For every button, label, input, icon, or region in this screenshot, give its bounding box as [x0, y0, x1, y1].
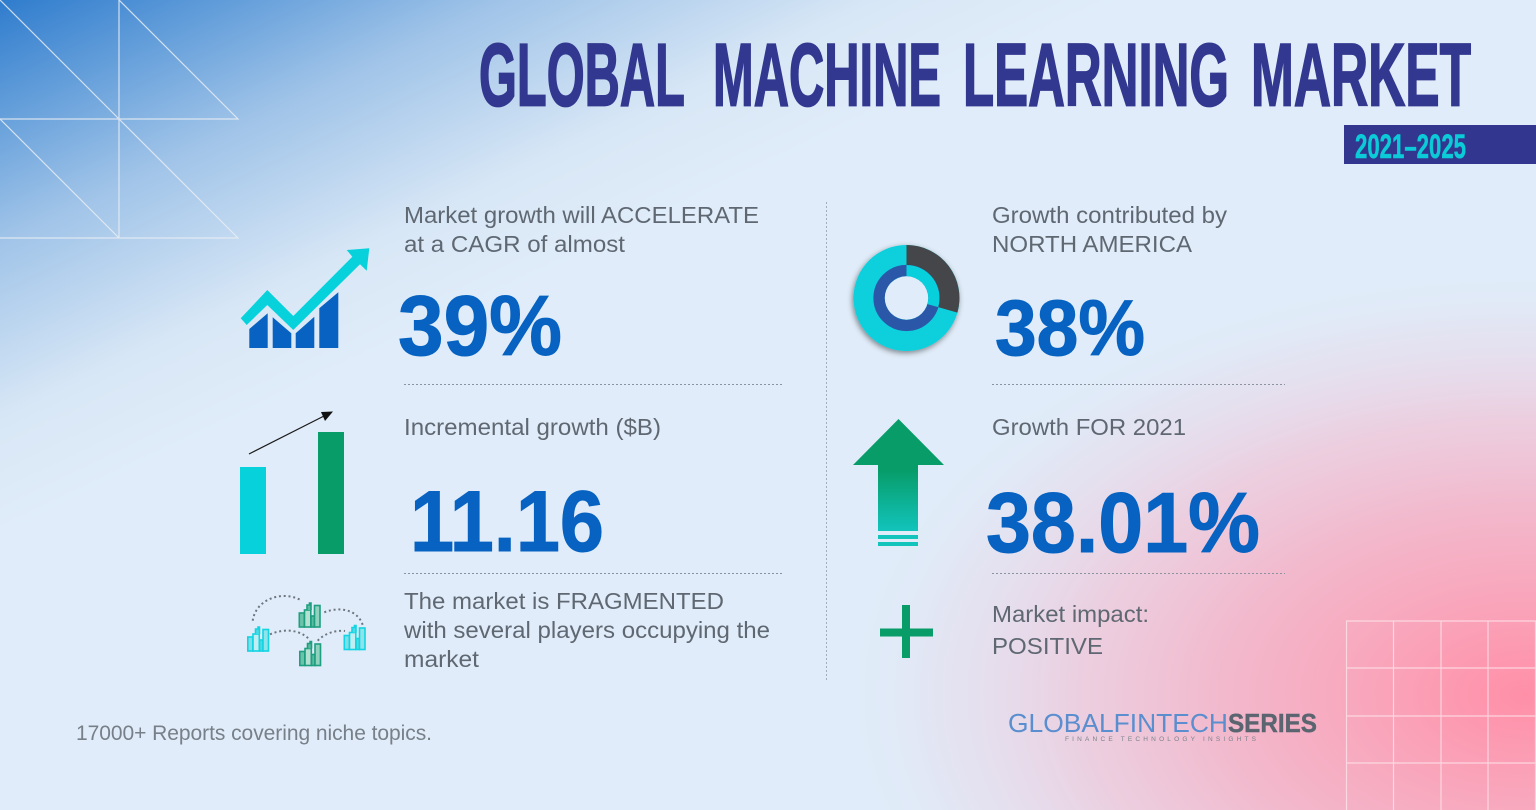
logo: Global Fintech Series: GLOBALFINTECH — [1008, 708, 1228, 738]
text: CAGR label: at a CAGR of almost — [404, 231, 625, 257]
panel: market impact — [880, 601, 1149, 659]
value: 11.16: 11.16 — [410, 474, 604, 570]
logo: Global Fintech Series — [1008, 708, 1317, 743]
date banner: 2021–2025 — [1355, 128, 1466, 166]
value: 39%: 39% — [398, 279, 562, 374]
text: CAGR label: Market growth will ACCELERATE — [404, 202, 759, 228]
divider: vertical — [826, 202, 828, 680]
value: 38%: 38% — [995, 283, 1145, 372]
panel: North America — [854, 202, 1227, 372]
text: fragmented description: The market is FRAGMENTED — [404, 588, 724, 614]
icon: up arrow — [853, 419, 944, 546]
footer note: 17000+ Reports covering niche topics. — [76, 722, 432, 745]
title: GLOBAL — [479, 24, 684, 124]
icon: donut chart — [854, 245, 960, 351]
panel: incremental growth — [240, 412, 661, 570]
icon: bars with arrow — [240, 412, 344, 554]
text: North America label: NORTH AMERICA — [992, 231, 1192, 257]
text: fragmented description: market — [404, 646, 479, 672]
icon: plus — [880, 605, 933, 658]
divider: rows — [404, 384, 1285, 574]
panel: fragmented market — [248, 588, 770, 672]
decorative triangle lattice — [0, 0, 238, 238]
value: 38.01%: 38.01% — [986, 476, 1260, 571]
title: MACHINE — [713, 24, 941, 124]
icon: connected cities — [248, 596, 365, 666]
text: North America label: Growth contributed by — [992, 202, 1227, 228]
logo: Global Fintech Series: SERIES — [1228, 708, 1317, 738]
text: growth label: Growth FOR 2021 — [992, 414, 1186, 440]
text: fragmented description: with several players occupying the — [403, 617, 770, 643]
panel: growth for 2021 — [853, 414, 1260, 571]
decorative square grid — [1346, 621, 1536, 810]
panel: CAGR — [241, 202, 759, 374]
title: LEARNING — [963, 24, 1229, 124]
text: incremental label: Incremental growth ($B) — [404, 414, 661, 440]
text: market impact: Market impact: — [992, 601, 1149, 627]
logo: Global Fintech Series: FINANCE TECHNOLOGY INSIGHTS — [1065, 736, 1257, 743]
icon: growth chart with arrow — [241, 248, 369, 348]
text: market impact: POSITIVE — [992, 633, 1103, 659]
